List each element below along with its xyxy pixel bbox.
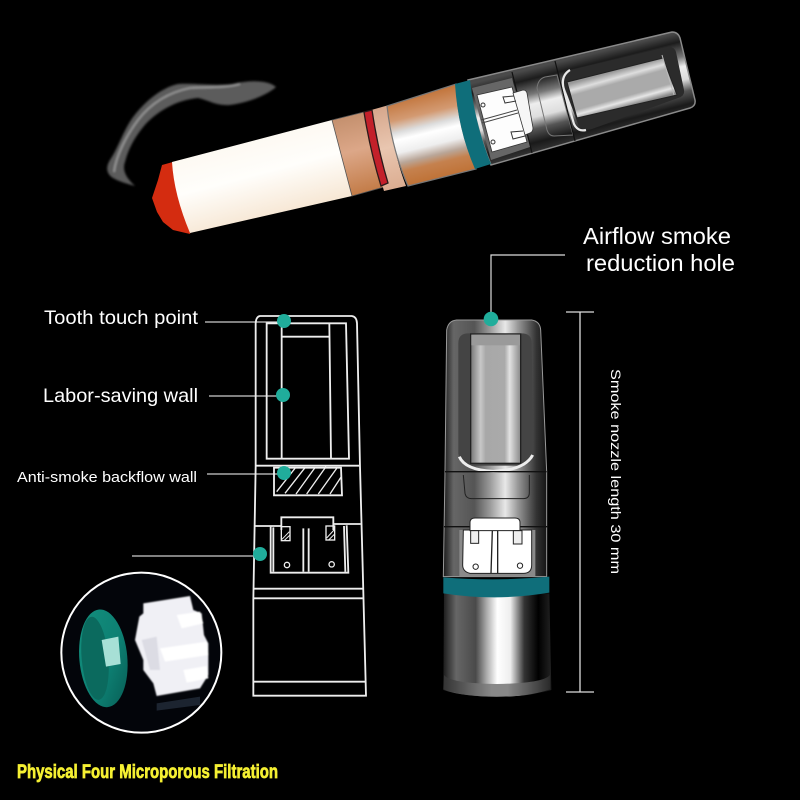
clip insert outline: [271, 517, 348, 573]
upper body: [443, 320, 547, 577]
marker dot: anti-smoke backflow wall: [277, 466, 291, 480]
leader: filter detail: [132, 555, 260, 557]
heading: airflow smoke reduction hole: Airflow smoke: [583, 223, 731, 249]
metal sleeve: [387, 84, 476, 186]
gear reflection: [157, 697, 200, 711]
marker dot: labor-saving wall: [276, 388, 290, 402]
length dimension bracket: [566, 312, 594, 692]
collar outline: [537, 75, 573, 136]
clip insert: [472, 78, 533, 160]
label: labor-saving wall: Labor-saving wall: [43, 385, 198, 407]
copper filter band: [332, 112, 384, 196]
lower metal sleeve: [443, 593, 551, 697]
divider lines: [253, 466, 366, 682]
airflow leader line: [491, 255, 565, 312]
collar outline: [463, 475, 529, 499]
window: [458, 333, 533, 471]
body seams: [512, 61, 575, 153]
leader: tooth touch point: [205, 321, 284, 323]
red ember tip: [152, 160, 200, 234]
mouthpiece body: [468, 32, 695, 165]
inner wall: [267, 323, 349, 459]
white gear filter: [135, 596, 208, 696]
inset: filter parts: [61, 573, 221, 733]
cigarette with holder illustration: [152, 32, 695, 234]
teal band: [443, 577, 549, 597]
outer outline: [253, 316, 366, 696]
inset circle: [61, 573, 221, 733]
line schematic of nozzle: [253, 316, 366, 696]
teal ring: [75, 607, 132, 709]
heading: airflow smoke reduction hole: reduction hole: [586, 250, 735, 276]
label: tooth touch point: Tooth touch point: [44, 307, 199, 329]
icon: smoke wisp: [107, 81, 276, 186]
white paper tube: [172, 120, 352, 233]
leader: anti-smoke backflow wall: [207, 473, 284, 475]
marker dot: tooth touch point: [277, 314, 291, 328]
label: smoke nozzle length: Smoke nozzle length 30 mm: [607, 369, 623, 574]
marker dot: filter: [253, 547, 267, 561]
heading: airflow smoke reduction hole: [583, 223, 735, 276]
sleeve base ring: [443, 675, 550, 697]
shaded nozzle illustration: [443, 320, 551, 697]
leader: labor-saving wall: [209, 395, 283, 397]
marker dot: airflow hole: [484, 312, 498, 326]
beige band: [364, 105, 406, 191]
red ring: [364, 110, 388, 186]
clip insert: [459, 518, 535, 577]
mouthpiece window: [563, 47, 684, 130]
caption: physical four microporous filtration: Physical Four Microporous Filtration: [17, 762, 278, 783]
label: anti-smoke backflow wall: Anti-smoke backflow wall: [17, 469, 197, 486]
teal band: [455, 80, 491, 169]
hatched backflow wall: [274, 467, 342, 495]
